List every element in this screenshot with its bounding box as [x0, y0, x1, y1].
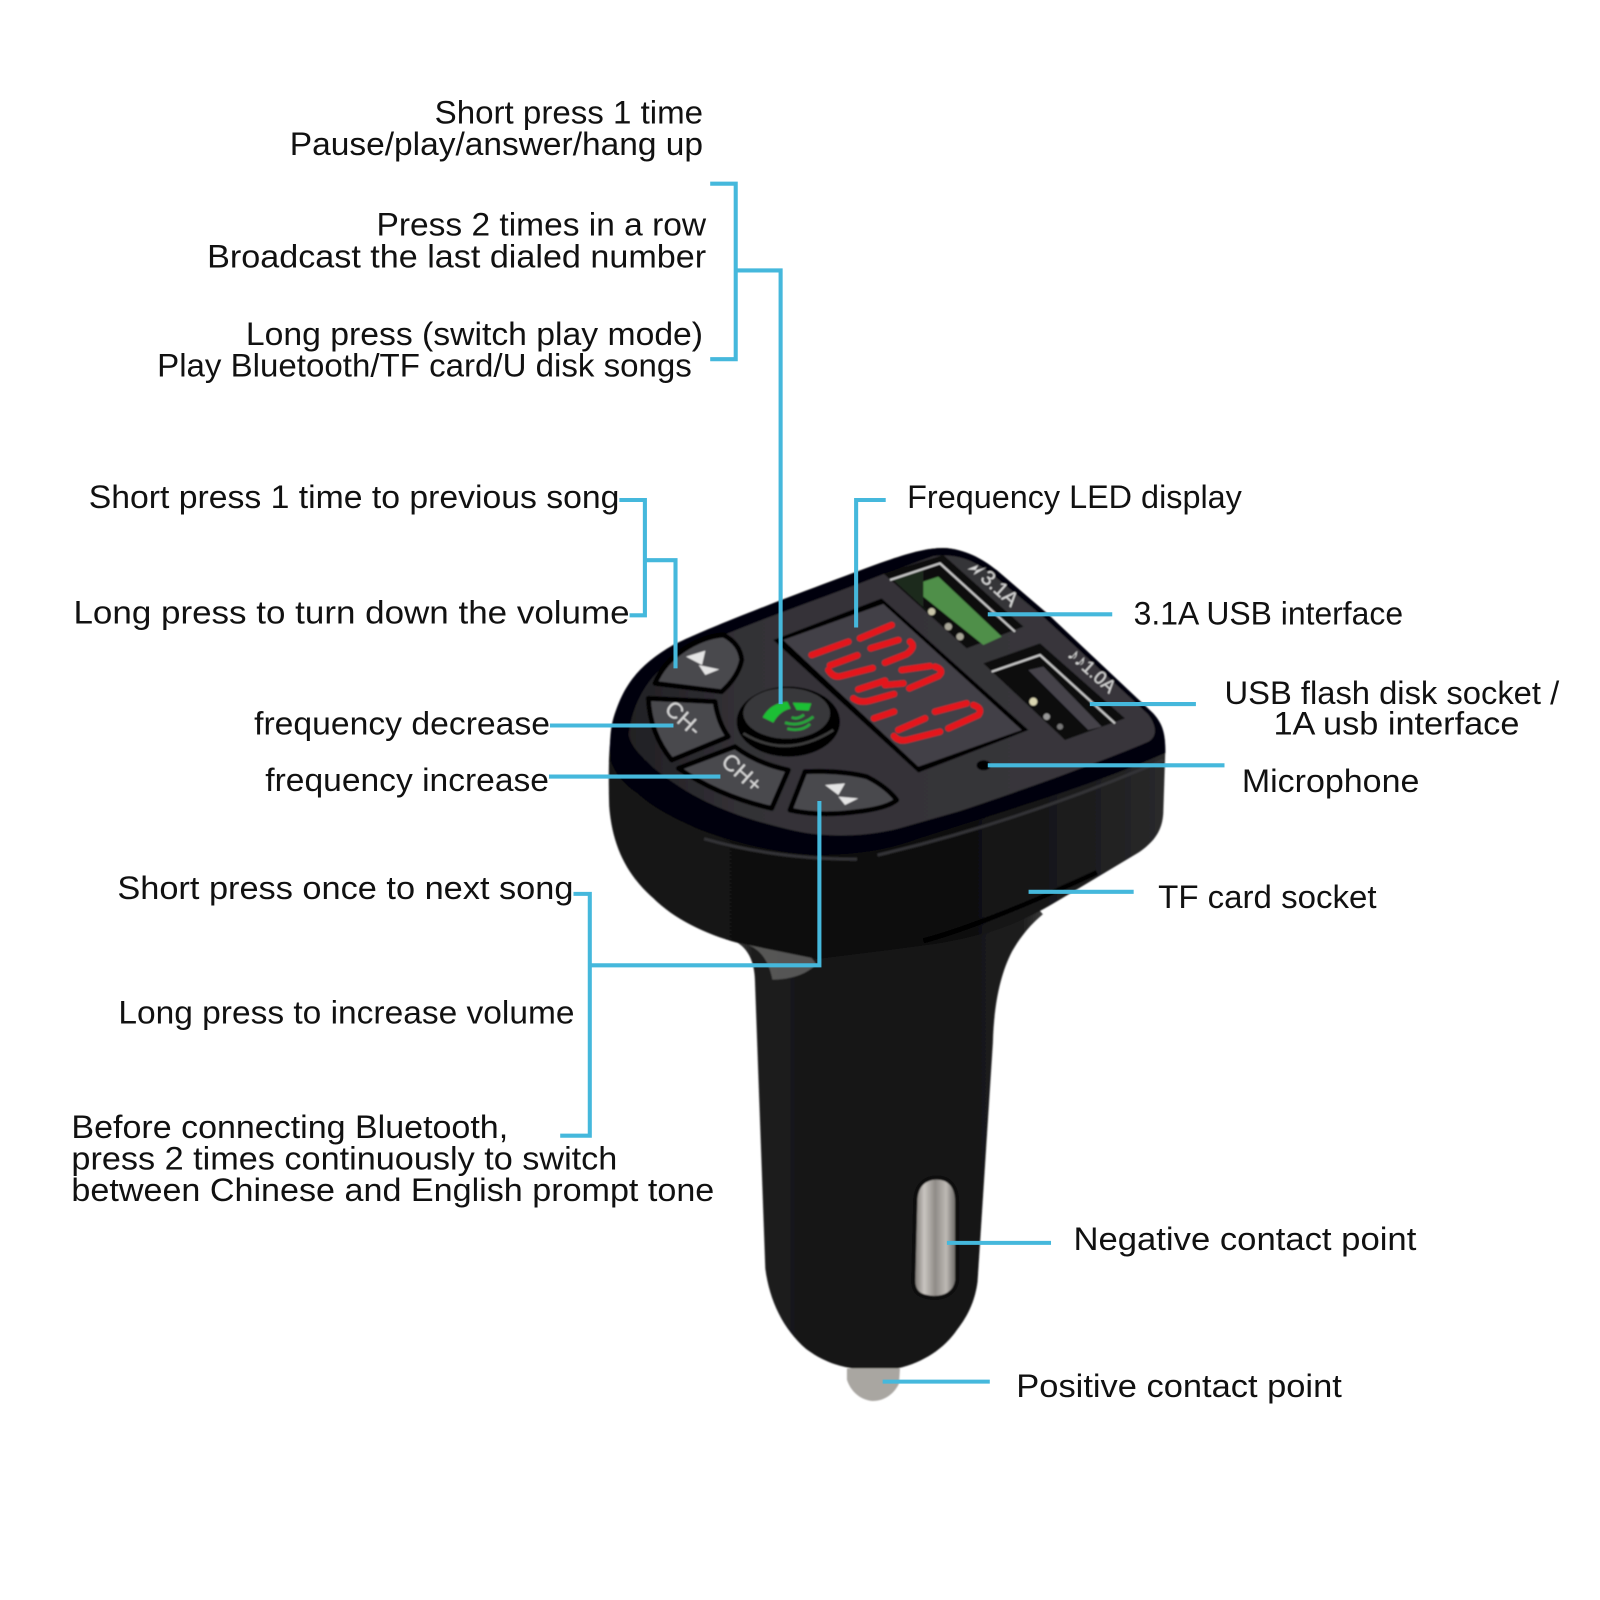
label: prompt tone: between Chinese and English prompt tone [71, 1171, 714, 1208]
neck highlight [748, 945, 816, 980]
line: CH- [550, 724, 673, 728]
label: prompt tone: press 2 times continuously to switch [71, 1139, 617, 1176]
button: CH- [648, 695, 728, 760]
label: USB flash disk socket [1224, 674, 1560, 742]
microphone hole [977, 760, 991, 770]
label: microphone: Microphone [1242, 762, 1419, 799]
positive contact tip [847, 1368, 900, 1401]
label: prompt tone [71, 1108, 714, 1208]
label: TF card socket: TF card socket [1158, 878, 1377, 915]
negative contact plate [913, 1178, 957, 1298]
label: USB flash disk socket: USB flash disk socket / [1224, 674, 1560, 711]
line: microphone [988, 763, 1224, 767]
label: short press 1 time: Short press 1 time [435, 93, 703, 130]
label 3.1A: 3.1A [976, 566, 1023, 612]
icon: phone [763, 702, 811, 723]
rim highlight [704, 760, 1163, 859]
line: previous button [619, 500, 676, 668]
top plate [629, 555, 1155, 835]
LED display [773, 598, 1028, 773]
label: long press play mode: Long press (switch play mode) [246, 315, 703, 352]
label: prompt tone: Before connecting Bluetooth, [71, 1108, 508, 1145]
USB port 1.0A [983, 643, 1125, 740]
label: frequency increase: frequency increase [265, 761, 549, 798]
device barrel [738, 888, 1043, 1368]
label: 3.1A USB interface: 3.1A USB interface [1134, 594, 1403, 631]
USB port 3.1A [883, 555, 1023, 648]
line: frequency display [856, 500, 886, 628]
label: frequency decrease: frequency decrease [254, 705, 550, 742]
label: short press 1 time: Pause/play/answer/hang up [290, 125, 703, 162]
label: press 2 times: Broadcast the last dialed number [207, 237, 706, 274]
device body shell [609, 548, 1165, 959]
top face [610, 548, 1165, 855]
label: previous song: Short press 1 time to previous song [89, 478, 619, 515]
call button [737, 687, 840, 757]
line: positive contact [883, 1380, 990, 1384]
line: negative contact [947, 1241, 1051, 1245]
leader lines [549, 184, 1224, 1382]
label: next song: Short press once to next song [117, 869, 573, 906]
line: CH+ [549, 775, 720, 779]
label 1.0A: ♪♪1.0A [1064, 643, 1121, 698]
button: previous [655, 635, 742, 692]
label: negative contact point: Negative contact point [1073, 1220, 1416, 1257]
line: USB flash socket [1090, 702, 1196, 706]
button: CH-: CH- [660, 695, 707, 741]
label: press 2 times [207, 206, 707, 274]
line: next button [560, 801, 819, 1136]
label: long press play mode: Play Bluetooth/TF card/U disk songs [157, 347, 692, 384]
control buttons [648, 635, 897, 814]
button: CH+ [678, 747, 788, 808]
label: frequency LED display: Frequency LED display [907, 478, 1243, 515]
label: volume up: Long press to increase volume [118, 993, 574, 1030]
red digits [812, 625, 980, 740]
label: volume down: Long press to turn down the volume [73, 593, 630, 630]
label: short press 1 time [290, 93, 703, 162]
label: USB flash disk socket: 1A usb interface [1273, 705, 1519, 742]
line: TF socket [1029, 890, 1134, 894]
line: 3.1A USB [988, 612, 1112, 616]
line: multifunction button [710, 184, 781, 704]
TF card slot [923, 872, 1097, 941]
icon: lightning [967, 565, 987, 575]
label: positive contact point: Positive contact point [1016, 1367, 1342, 1404]
car charger device [609, 548, 1165, 1401]
label: press 2 times: Press 2 times in a row [377, 206, 707, 243]
button: CH+: CH+ [717, 748, 768, 798]
label: long press play mode [157, 315, 703, 384]
button: next [790, 771, 897, 814]
